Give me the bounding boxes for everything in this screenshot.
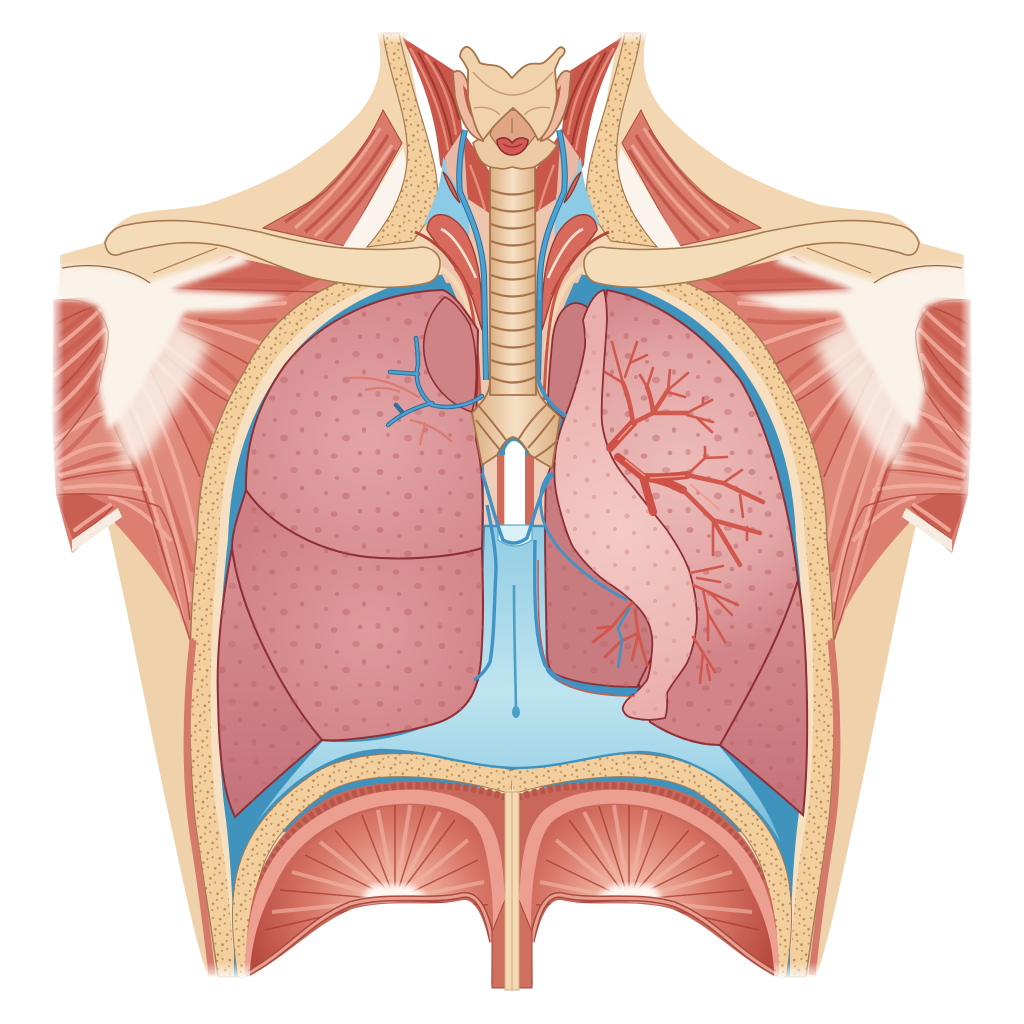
tendon: white shoulder fan xyxy=(55,253,287,552)
left lung: upper lobe speckle xyxy=(246,290,483,558)
left lung: apical oval xyxy=(424,297,476,412)
tendon: white neck strap xyxy=(343,148,406,248)
muscle: deep neck xyxy=(402,37,490,225)
larynx: lower collar xyxy=(473,115,557,169)
fade: top edge left xyxy=(370,30,420,44)
left lung: middle lobe speckle xyxy=(232,490,483,740)
muscle fibres: light xyxy=(55,303,285,620)
vessel: U-shaped connector under bronchi xyxy=(482,473,553,543)
larynx: epiglottis xyxy=(490,110,536,145)
muscle fibres: mid tone xyxy=(55,280,300,590)
vessel: blue neck vessel xyxy=(459,130,486,380)
vessel: right mediastinal red line xyxy=(538,560,635,696)
neck: dark blue patch above lung xyxy=(427,283,472,345)
neck: red strand xyxy=(455,268,480,400)
fade: left edge xyxy=(50,255,64,560)
mediastinum: central drop tip xyxy=(512,706,520,718)
larynx: right wing xyxy=(541,71,571,141)
fade: bottom edge xyxy=(190,962,250,980)
muscle fibres: dark xyxy=(54,288,320,640)
left lung: blue vessel dark xyxy=(388,338,482,425)
vessel: right bronchus blue curve xyxy=(538,300,566,416)
right lung: pale S-shaped fold xyxy=(554,290,697,720)
bronchi: tracheal bifurcation xyxy=(472,380,560,468)
left lung: middle lobe xyxy=(232,490,483,740)
larynx: left wing xyxy=(453,71,483,141)
chest wall: red outer strip xyxy=(187,640,212,975)
central tendon strip xyxy=(505,792,512,990)
larynx xyxy=(453,47,571,169)
larynx: center line xyxy=(511,118,513,133)
neck: dotted band xyxy=(367,33,437,247)
muscle: shoulder base xyxy=(52,256,430,640)
right lung: medial lower lobe speckle xyxy=(545,460,655,687)
diaphragm: striped top edge xyxy=(262,786,505,880)
right lung: fold speckle xyxy=(554,290,697,720)
fade: top edge right xyxy=(604,30,654,44)
bronchial tree: medial red branch xyxy=(593,603,647,665)
mediastinum: white central slit xyxy=(505,441,525,526)
skin: line under clavicle xyxy=(153,248,217,273)
right lung xyxy=(545,290,807,815)
mediastinum: red strand left xyxy=(497,455,504,530)
vessel: medial blue branch xyxy=(618,607,630,668)
right lung: lower outer lobe speckle xyxy=(720,580,807,815)
fade: bottom edge right xyxy=(774,962,834,980)
larynx: left wing streak xyxy=(463,85,477,124)
larynx: lips opening xyxy=(497,138,528,155)
ribs: dotted band outline xyxy=(244,765,512,975)
left lung xyxy=(218,290,483,817)
bronchial tree: tips xyxy=(605,342,747,683)
mediastinum: pale backing below bronchi xyxy=(484,455,555,530)
right lung: main lobe speckle xyxy=(590,290,798,745)
neck: blue triangle xyxy=(424,157,470,250)
diaphragm: fan muscle xyxy=(250,804,493,970)
skin: lower torso side xyxy=(108,515,222,977)
trachea xyxy=(490,160,536,395)
larynx: cartilage crease xyxy=(473,72,553,115)
right lung: medial lower lobe xyxy=(545,460,655,687)
neck: pale muscle xyxy=(445,130,468,205)
mediastinum: central drop line xyxy=(514,585,516,715)
bronchial tree: trunk highlight xyxy=(618,425,720,510)
right lung: apical dark lobe xyxy=(548,303,594,420)
left lung: lower lobe speckle xyxy=(218,548,322,817)
chest wall: dotted bone layer xyxy=(190,263,512,977)
left half: shoulder, neck and chest wall xyxy=(52,32,512,1000)
central muscle flank xyxy=(492,900,505,988)
vessel: right mediastinal line xyxy=(535,540,637,692)
diaphragm: lower edge highlight xyxy=(249,895,492,973)
left lung: upper lobe xyxy=(246,290,483,558)
diaphragm: outer red arch xyxy=(246,782,505,988)
right half: mirrored shoulder, neck and chest wall xyxy=(512,32,972,1000)
vessel: blue neck highlight xyxy=(459,130,486,380)
left lung: lower lobe xyxy=(218,548,322,817)
neck: red looped muscle xyxy=(415,215,482,330)
neck: backing strands xyxy=(425,195,492,405)
right lung: lower outer lobe xyxy=(720,580,807,815)
muscle: trapezius xyxy=(263,110,402,246)
bronchial tree: mid branches xyxy=(623,383,763,565)
left lung: blue vessel light xyxy=(388,338,482,425)
larynx: thyroid cartilage xyxy=(460,47,565,140)
vessel: right lung blue branch xyxy=(540,473,627,600)
clavicle xyxy=(105,220,440,287)
pleural fluid: light blue base and funnel xyxy=(238,526,786,856)
neck: pale strand xyxy=(440,268,478,350)
neck: small fold xyxy=(443,172,460,203)
chest wall: pale inner layer xyxy=(211,270,512,977)
right lung: main lobe xyxy=(590,290,798,745)
ribs: dotted band fill xyxy=(244,765,512,975)
diaphragm: pale arch band xyxy=(252,797,499,985)
mediastinum: red strand right xyxy=(525,455,534,530)
skin: shoulder and trapezius xyxy=(60,32,440,295)
diaphragm: lower free edge xyxy=(249,895,492,973)
pleural lining: blue band xyxy=(219,272,512,977)
vessel: left mediastinal line xyxy=(474,505,496,680)
mediastinum: funnel box xyxy=(498,525,532,546)
left lung: faint red vessels xyxy=(348,378,452,445)
fade: right edge xyxy=(960,255,974,560)
larynx: right wing streak xyxy=(547,85,561,124)
bronchial tree: trunks xyxy=(610,423,687,512)
white space under diaphragm xyxy=(246,900,491,1000)
